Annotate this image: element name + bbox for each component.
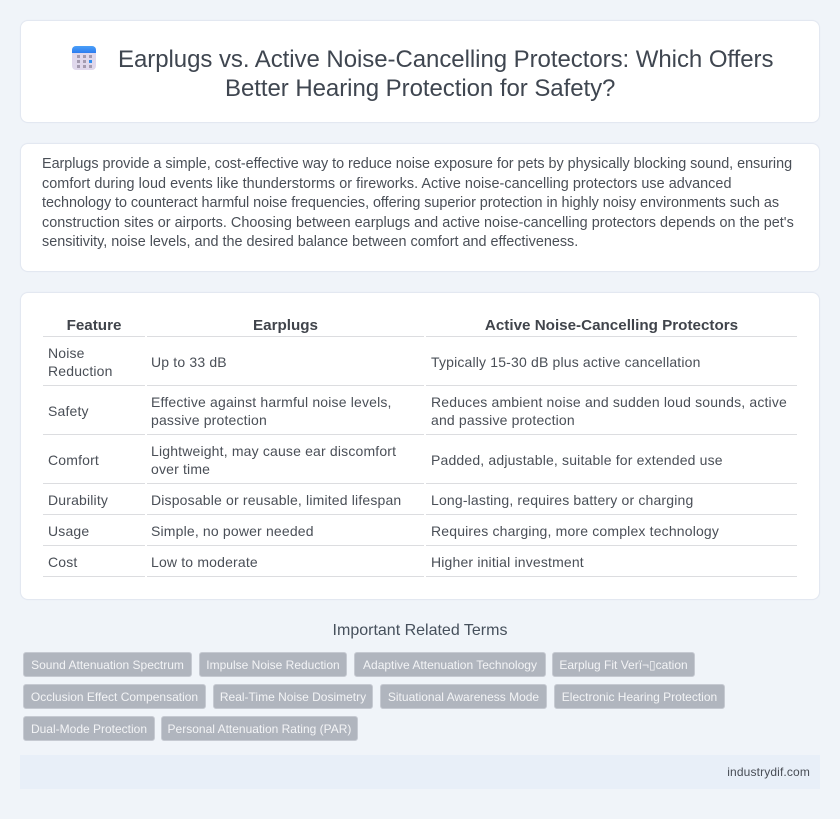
row: cost: [48, 554, 584, 570]
row: durability: Durability: [48, 492, 108, 508]
tag list: related terms: Occlusion Effect Compensation: [31, 690, 198, 704]
title: [118, 46, 773, 102]
text block: introduction: sensitivity, noise levels, and the desired balance between comfort and effectiveness.: [42, 234, 578, 250]
row: durability: [48, 492, 693, 508]
panel: introduction: [20, 143, 820, 272]
row: comfort: Padded, adjustable, suitable for extended use: [431, 452, 723, 468]
text block: introduction: comfort during loud events like thunderstorms or fireworks. Active noise-cancelling protectors use advanced: [42, 176, 732, 192]
footer text: industrydif.com: [727, 765, 810, 779]
row: usage: Requires charging, more complex technology: [431, 523, 719, 539]
row: cost: Higher initial investment: [431, 554, 584, 570]
row: durability: Disposable or reusable, limited lifespan: [151, 492, 401, 508]
tag list: related terms: Electronic Hearing Protection: [562, 690, 717, 704]
icon: calendar: [72, 46, 96, 70]
row: noise reduction: [48, 345, 701, 379]
tag list: related terms: [23, 652, 725, 741]
row: durability: Long-lasting, requires battery or charging: [431, 492, 693, 508]
tag list: related terms: Adaptive Attenuation Technology: [363, 658, 537, 672]
table header: feature: Feature: [67, 317, 121, 334]
row: cost: Cost: [48, 554, 77, 570]
row: safety: Effective against harmful noise levels,: [151, 394, 392, 410]
tag list: related terms: Personal Attenuation Rating (PAR): [168, 722, 351, 736]
title: Earplugs vs. Active Noise-Cancelling Protectors: Which Offers: [118, 46, 773, 73]
row: noise reduction: Typically 15-30 dB plus active cancellation: [431, 354, 701, 370]
row: comfort: Comfort: [48, 452, 99, 468]
footer bar: [20, 755, 820, 789]
text block: introduction: technology to counteract harmful noise frequencies, offering superior protection in highly noisy environments such as: [42, 195, 779, 211]
tag list: related terms: Earplug Fit Verï¬▯cation: [559, 658, 688, 672]
table header: earplugs: Earplugs: [253, 317, 318, 334]
row: usage: Simple, no power needed: [151, 523, 314, 539]
row: safety: passive protection: [151, 412, 267, 428]
row: usage: Usage: [48, 523, 89, 539]
row: safety: [48, 394, 787, 428]
title: Better Hearing Protection for Safety?: [225, 75, 615, 102]
panel: comparison table: [20, 292, 820, 600]
row: safety: and passive protection: [431, 412, 575, 428]
text block: introduction: [42, 156, 794, 250]
panel: header: [20, 20, 820, 123]
row: noise reduction: Reduction: [48, 363, 113, 379]
tag list: related terms: Impulse Noise Reduction: [206, 658, 340, 672]
row: comfort: [48, 443, 723, 477]
row: usage: [48, 523, 719, 539]
row: comfort: over time: [151, 461, 210, 477]
row: comfort: Lightweight, may cause ear discomfort: [151, 443, 396, 459]
row: cost: Low to moderate: [151, 554, 258, 570]
row: safety: Reduces ambient noise and sudden loud sounds, active: [431, 394, 787, 410]
heading: related terms: Important Related Terms: [333, 622, 507, 639]
row: noise reduction: Noise: [48, 345, 85, 361]
tag list: related terms: Real-Time Noise Dosimetry: [220, 690, 366, 704]
tag list: related terms: Sound Attenuation Spectrum: [31, 658, 184, 672]
text block: introduction: construction sites or airports. Choosing between earplugs and active noise-cancelling protectors depends on the pet's: [42, 214, 794, 230]
table header: active noise-cancelling protectors: Active Noise-Cancelling Protectors: [485, 317, 738, 334]
tag list: related terms: Dual-Mode Protection: [31, 722, 147, 736]
tag list: related terms: Situational Awareness Mode: [388, 690, 539, 704]
row: noise reduction: Up to 33 dB: [151, 354, 227, 370]
row: safety: Safety: [48, 403, 89, 419]
text block: introduction: Earplugs provide a simple, cost-effective way to reduce noise exposure for pets by physically blocking sound, ensuring: [42, 156, 792, 172]
